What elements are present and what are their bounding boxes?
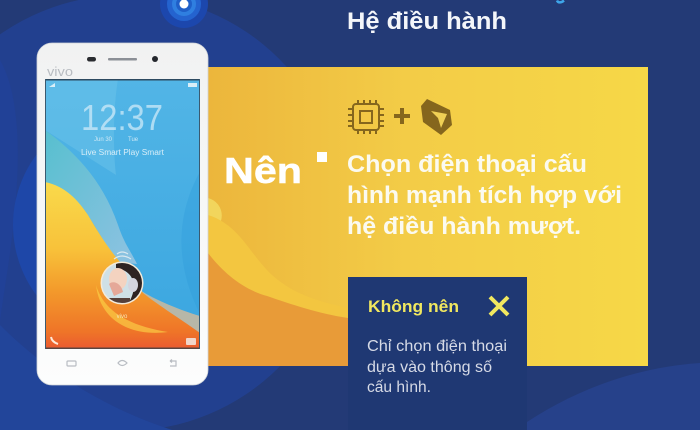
status icons — [49, 83, 197, 87]
text block: recommendation: Chọn điện thoại cấu — [347, 151, 587, 178]
clock time: 12:37 — [81, 97, 163, 138]
phone body — [37, 43, 208, 385]
swipe chevrons — [114, 252, 131, 259]
text block: do not advice: cấu hình. — [367, 379, 431, 396]
text block: do not advice: Chỉ chọn điện thoại — [367, 338, 507, 355]
panel: do not dark card — [348, 277, 527, 430]
screen — [45, 79, 201, 349]
clock date: Jun 30 — [94, 137, 113, 143]
avatar — [100, 262, 144, 304]
nav buttons — [67, 360, 176, 366]
text block: recommendation: hình mạnh tích hợp với — [347, 182, 622, 209]
phone shortcut icon — [51, 337, 58, 344]
heading: Không nên: Không nên — [368, 297, 459, 316]
phone illustration: Tue — [128, 137, 139, 143]
panel: recommended yellow card — [208, 67, 648, 366]
text block: do not advice: dựa vào thông số — [367, 359, 492, 376]
icon: top blue target circle — [160, 0, 208, 28]
heading: Hệ điều hành — [347, 8, 507, 35]
vivo logo: vivo — [47, 64, 73, 79]
camera shortcut icon — [186, 338, 196, 345]
icon: OS gem — [421, 99, 452, 135]
cropped blue title descender — [557, 0, 564, 2]
earpiece and camera — [87, 56, 158, 62]
phone illustration — [37, 43, 208, 385]
bullet square — [317, 152, 327, 162]
text block: do not advice — [367, 338, 507, 396]
slogan: Live Smart Play Smart — [81, 148, 165, 157]
text block: recommendation — [347, 151, 622, 240]
heading: Nên: Nên — [224, 150, 302, 191]
text block: recommendation: hệ điều hành mượt. — [347, 213, 581, 240]
vivo caption: vivo — [117, 314, 128, 320]
icon: processor chip — [348, 100, 384, 134]
icon: plus — [394, 108, 410, 124]
icon: cross — [490, 297, 508, 315]
